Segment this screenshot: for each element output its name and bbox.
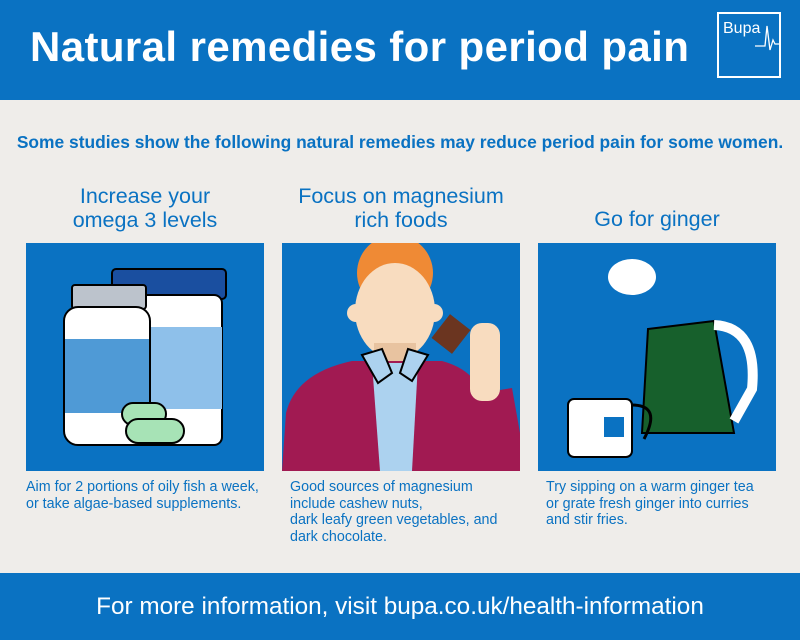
text: magnesium xyxy=(290,479,497,544)
heading: magnesium: rich foods xyxy=(354,208,448,232)
text: magnesium: dark leafy green vegetables, and xyxy=(290,512,497,528)
panel: magnesium woman xyxy=(282,243,520,471)
intro text: Some studies show the following natural remedies may reduce period pain for some women. xyxy=(17,132,783,152)
heading: magnesium xyxy=(298,184,504,232)
text: omega 3 xyxy=(26,479,259,512)
text: magnesium: include cashew nuts, xyxy=(290,496,423,512)
panel: ginger kettle xyxy=(538,243,776,471)
text: ginger: or grate fresh ginger into curries xyxy=(546,496,749,512)
footer: For more information, visit bupa.co.uk/health-information xyxy=(96,593,704,620)
logo: Bupa xyxy=(723,20,760,37)
heading: omega 3 xyxy=(73,184,217,232)
title: Natural remedies for period pain xyxy=(30,23,689,70)
text: omega 3: or take algae-based supplements. xyxy=(26,496,241,512)
text: ginger: and stir fries. xyxy=(546,512,628,528)
text: magnesium: dark chocolate. xyxy=(290,528,387,544)
text: ginger xyxy=(546,479,754,528)
heading: omega 3: Increase your xyxy=(80,184,210,208)
text: omega 3: Aim for 2 portions of oily fish a week, xyxy=(26,479,259,495)
heading: omega 3: omega 3 levels xyxy=(73,208,217,232)
logo xyxy=(717,12,781,78)
heading: magnesium: Focus on magnesium xyxy=(298,184,504,208)
footer xyxy=(0,573,800,640)
text: ginger: Try sipping on a warm ginger tea xyxy=(546,479,754,495)
heading: ginger: Go for ginger xyxy=(594,207,720,231)
text: magnesium: Good sources of magnesium xyxy=(290,479,473,495)
panel: omega 3 bottles xyxy=(26,243,264,471)
header bar xyxy=(0,0,800,100)
